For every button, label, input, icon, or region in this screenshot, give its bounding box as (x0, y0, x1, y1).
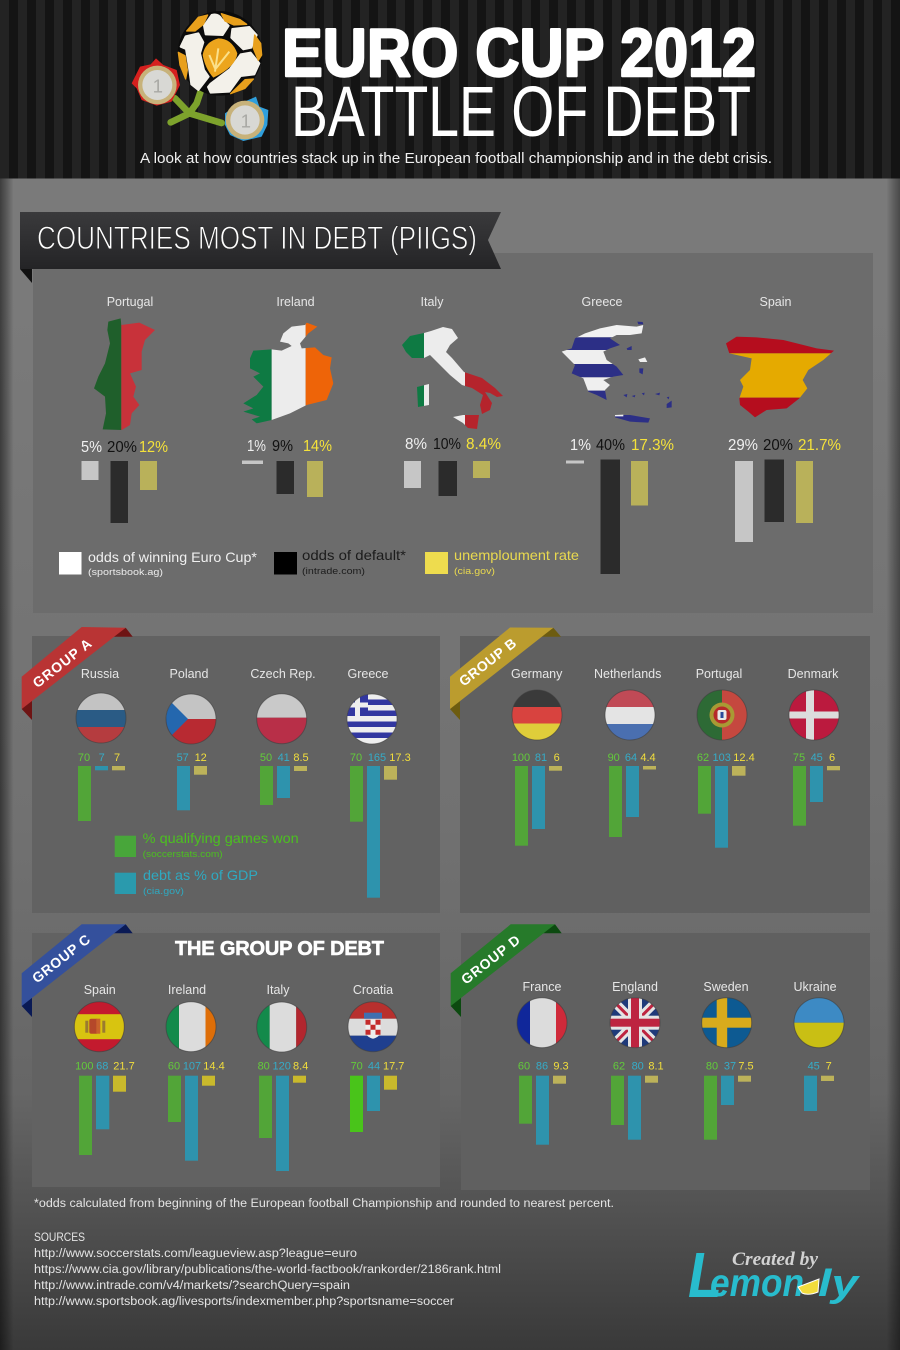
ribbon: Group B: GROUP B (456, 635, 519, 689)
values: Croatia: 44 (368, 1061, 380, 1073)
values: Ireland: 14.4 (203, 1061, 225, 1073)
values: Italy (405, 436, 501, 453)
values: France (518, 1061, 569, 1073)
country: Czech Republic (250, 667, 316, 805)
values: Czech Republic: 41 (278, 752, 290, 764)
logo: Created by Lemonly: L (688, 1239, 722, 1311)
values: Russia (78, 752, 120, 764)
country: Greece: Greece (582, 295, 623, 309)
bars: Spain (735, 460, 813, 542)
values: Poland (177, 752, 207, 764)
country: France: France (523, 980, 561, 994)
country: Italy: Italy (267, 983, 290, 997)
sources list: http://www.sportsbook.ag/livesports/indexmember.php?sportsname=soccer (34, 1296, 454, 1308)
legend: unemployment rate: unemploument rate (454, 547, 579, 563)
country: Italy (257, 983, 308, 1171)
values: Sweden: 37 (724, 1061, 736, 1073)
country: England (610, 980, 664, 1140)
logo: Created by Lemonly: ly (818, 1263, 860, 1305)
country: Ireland (166, 983, 225, 1161)
flag: Ukraine (794, 998, 844, 1048)
values: Czech Republic (260, 752, 309, 764)
values: Spain: 21.7% (798, 437, 841, 454)
sources list: http://www.intrade.com/v4/markets/?searchQuery=spain (34, 1280, 350, 1292)
country: Netherlands: Netherlands (594, 667, 661, 681)
map: Spain (726, 336, 834, 418)
values: Portugal (81, 439, 168, 456)
bars: Denmark (793, 766, 840, 826)
title: Euro Cup 2012: EURO CUP 2012 (282, 15, 756, 91)
bars: Greece (566, 460, 648, 574)
values: France: 60 (518, 1061, 530, 1073)
flag: France (517, 998, 567, 1048)
values: Spain: 29% (728, 437, 758, 454)
icon: football (178, 11, 262, 96)
title: Battle of Debt: BATTLE OF DEBT (291, 73, 751, 152)
values: Portugal: 20% (107, 439, 137, 456)
flag: Ireland (166, 1002, 216, 1052)
country: Italy: Italy (421, 295, 444, 309)
sources list: http://www.soccerstats.com/leagueview.asp?league=euro (34, 1248, 357, 1260)
values: Italy: 10% (433, 436, 461, 453)
values: Germany: 100 (512, 752, 530, 764)
values: Italy: 120 (273, 1061, 291, 1073)
values: Netherlands: 4.4 (640, 752, 656, 764)
country: Greece (347, 667, 411, 898)
values: Italy: 8.4 (293, 1061, 308, 1073)
flag: Greece (347, 694, 397, 744)
country: Ireland: Ireland (168, 983, 206, 997)
country: Germany (511, 667, 563, 846)
bars: Germany (515, 766, 562, 846)
bars: Czech Republic (260, 766, 307, 805)
panel: countries most in debt (20, 212, 873, 613)
values: England: 62 (613, 1061, 625, 1073)
map: Portugal (94, 318, 155, 430)
values: Spain: 100 (75, 1061, 93, 1073)
bars: Italy (259, 1076, 306, 1171)
values: Italy: 8.4% (466, 436, 501, 453)
values: Sweden (706, 1061, 754, 1073)
values: Germany: 6 (554, 752, 560, 764)
values: Ukraine: 7 (826, 1061, 832, 1073)
icon: blue coin flower: 1 (241, 110, 251, 131)
bars: Spain (79, 1076, 126, 1155)
map: Ireland (244, 322, 334, 424)
country: Russia: Russia (81, 667, 119, 681)
flag: Netherlands (605, 690, 655, 740)
bars: Portugal (82, 461, 157, 523)
country: Spain: Spain (760, 295, 792, 309)
values: Denmark (793, 752, 835, 764)
country: Portugal: Portugal (107, 295, 153, 309)
bars: Netherlands (609, 766, 656, 837)
legend: odds of winning (59, 549, 258, 578)
values: Netherlands: 64 (625, 752, 637, 764)
panel: Group B (450, 628, 870, 913)
flag: Croatia (348, 1002, 398, 1052)
values: Greece: 40% (596, 437, 625, 454)
logo: Created by Lemonly: emon (710, 1262, 804, 1305)
legend: odds of default: odds of default* (302, 547, 407, 563)
country: Spain (723, 295, 841, 542)
ribbon: Group A: GROUP A (29, 635, 94, 691)
legend: odds of winning: (sportsbook.ag) (88, 567, 163, 578)
bars: Portugal (698, 766, 746, 848)
values: Netherlands: 90 (608, 752, 620, 764)
flag: England (610, 998, 660, 1048)
icon: red coin flower: 1 (153, 75, 163, 96)
values: Russia: 7 (114, 752, 120, 764)
bars: England (611, 1076, 658, 1140)
values: Ukraine (808, 1061, 832, 1073)
values: England: 8.1 (648, 1061, 664, 1073)
values: Ireland: 1% (247, 438, 266, 455)
ribbon: Group C (22, 924, 133, 1017)
sources list (34, 1232, 501, 1308)
values: Croatia: 70 (351, 1061, 363, 1073)
legend: unemployment rate: (cia.gov) (454, 566, 495, 577)
values: Spain: 21.7 (113, 1061, 135, 1073)
values: Ireland: 9% (272, 438, 293, 455)
bars: Sweden (704, 1076, 751, 1140)
map: Greece (560, 322, 672, 423)
ribbon: Group D: GROUP D (458, 932, 523, 987)
country: Ireland: Ireland (276, 295, 315, 309)
values: Ireland (247, 438, 332, 455)
values: Poland: 57 (177, 752, 189, 764)
flag: Poland (drawn as Czech) (164, 694, 216, 744)
bars: Poland (177, 766, 207, 810)
country: Croatia: Croatia (353, 983, 393, 997)
values: England: 80 (632, 1061, 644, 1073)
flag: Portugal (697, 690, 747, 740)
legend: unemployment rate (425, 547, 579, 577)
legend: qualifying games won: % qualifying games won (143, 830, 299, 846)
flag: Germany (512, 690, 562, 740)
country: Spain (74, 983, 135, 1155)
bars: Ukraine (804, 1076, 834, 1111)
values: Spain (728, 437, 841, 454)
values: Croatia (351, 1061, 404, 1073)
map: Italy (402, 327, 503, 429)
values: Greece: 1% (570, 437, 591, 454)
values: Spain: 68 (96, 1061, 108, 1073)
legend: odds of default (274, 547, 407, 577)
country: Italy (402, 296, 503, 496)
values: Germany: 81 (535, 752, 547, 764)
logo: Created by Lemonly (688, 1239, 860, 1311)
country: Greece (560, 295, 674, 574)
values: Sweden: 80 (706, 1061, 718, 1073)
country: Portugal (696, 667, 755, 848)
values: Greece: 165 (368, 752, 386, 764)
footnote: *odds calculated from beginning of the European football Championship and rounded to nearest percent. (34, 1198, 614, 1210)
values: Greece: 17.3% (631, 437, 674, 454)
values: Ireland (168, 1061, 225, 1073)
flag: Spain (74, 1002, 124, 1052)
legend: odds of default: (intrade.com) (302, 566, 365, 577)
values: Italy: 80 (258, 1061, 270, 1073)
icon: stem (171, 88, 222, 123)
logo: Created by Lemonly: Created by (732, 1249, 819, 1270)
bars: France (519, 1076, 566, 1145)
values: Poland: 12 (195, 752, 207, 764)
values: Ukraine: 45 (808, 1061, 820, 1073)
values: England (613, 1061, 664, 1073)
country: Poland: Poland (170, 667, 209, 681)
values: France: 9.3 (553, 1061, 569, 1073)
icon: Euro 2012 ball and coin flowers (132, 11, 268, 141)
country: Russia (76, 667, 126, 821)
country: Czech Republic: Czech Rep. (250, 667, 316, 681)
values: Portugal: 103 (713, 752, 731, 764)
values: Spain (75, 1061, 135, 1073)
values: Russia: 70 (78, 752, 90, 764)
country: Portugal: Portugal (696, 667, 742, 681)
values: Russia: 7 (99, 752, 105, 764)
country: Ukraine: Ukraine (793, 980, 837, 994)
values: Greece: 17.3 (389, 752, 411, 764)
banner: section heading: COUNTRIES MOST IN DEBT (PIIGS) (37, 220, 477, 256)
header band (0, 0, 900, 178)
values: Sweden: 7.5 (738, 1061, 754, 1073)
sources list: https://www.cia.gov/library/publications/the-world-factbook/rankorder/2186rank.html (34, 1264, 501, 1276)
country: Ukraine (793, 980, 844, 1111)
country: Germany: Germany (511, 667, 563, 681)
bars: Croatia (350, 1076, 397, 1132)
values: Portugal (697, 752, 755, 764)
banner: section heading (20, 212, 501, 283)
values: Greece (350, 752, 411, 764)
country: Netherlands (594, 667, 661, 837)
values: Germany (512, 752, 560, 764)
flag: Russia (76, 693, 126, 743)
country: Denmark (788, 667, 840, 826)
values: Croatia: 17.7 (383, 1061, 404, 1073)
bars: Russia (78, 766, 125, 821)
values: Denmark: 45 (811, 752, 823, 764)
values: Portugal: 62 (697, 752, 709, 764)
legend: qualifying games won: (soccerstats.com) (143, 849, 223, 859)
legend: qualifying games won (115, 830, 299, 859)
values: Ireland: 60 (168, 1061, 180, 1073)
values: Italy: 8% (405, 436, 427, 453)
values: Ireland: 14% (303, 438, 332, 455)
values: France: 86 (536, 1061, 548, 1073)
values: Portugal: 5% (81, 439, 102, 456)
subtitle: A look at how countries stack up in the European football championship and in the debt crisis. (140, 151, 772, 167)
country: Portugal (81, 295, 168, 523)
country: Sweden: Sweden (703, 980, 749, 994)
panel: Group C (22, 924, 440, 1187)
panel: Group D (451, 924, 870, 1190)
values: Czech Republic: 8.5 (293, 752, 309, 764)
bars: Italy (404, 461, 490, 496)
flag: Czech Republic (drawn as Poland) (257, 694, 307, 744)
values: Portugal: 12% (139, 439, 168, 456)
legend: debt as % of GDP: debt as % of GDP (143, 867, 258, 883)
ribbon: Group D (451, 924, 562, 1017)
values: Greece (570, 437, 674, 454)
flag: Denmark (789, 690, 839, 740)
ribbon: Group C: GROUP C (29, 931, 93, 986)
values: Denmark: 75 (793, 752, 805, 764)
values: Italy (258, 1061, 308, 1073)
values: Denmark: 6 (829, 752, 835, 764)
values: Czech Republic: 50 (260, 752, 272, 764)
ribbon: Group A (22, 627, 133, 720)
country: Greece: Greece (348, 667, 389, 681)
values: Spain: 20% (763, 437, 793, 454)
values: Portugal: 12.4 (733, 752, 755, 764)
values: Greece: 70 (350, 752, 362, 764)
values: Ireland: 107 (183, 1061, 201, 1073)
legend: odds of winning: odds of winning Euro Cup* (88, 549, 258, 565)
legend: debt as % of GDP: (cia.gov) (143, 886, 184, 896)
bars: Ireland (242, 460, 323, 497)
panel: Group A (22, 627, 440, 913)
country: Sweden (702, 980, 754, 1140)
country: Poland (164, 667, 216, 810)
bars: Greece (350, 766, 397, 898)
country: France (517, 980, 569, 1145)
flag: Sweden (702, 998, 752, 1048)
bars: Ireland (168, 1076, 215, 1161)
heading: The Group of Debt: THE GROUP OF DEBT (175, 938, 384, 960)
country: Spain: Spain (84, 983, 116, 997)
flag: Italy (257, 1002, 307, 1052)
country: Denmark: Denmark (788, 667, 839, 681)
country: England: England (612, 980, 658, 994)
values: Netherlands (608, 752, 656, 764)
ribbon: Group B (450, 628, 561, 720)
country: Croatia (348, 983, 404, 1132)
country: Ireland (240, 295, 336, 497)
legend: debt as % of GDP (115, 867, 258, 896)
sources list: SOURCES (34, 1232, 85, 1244)
